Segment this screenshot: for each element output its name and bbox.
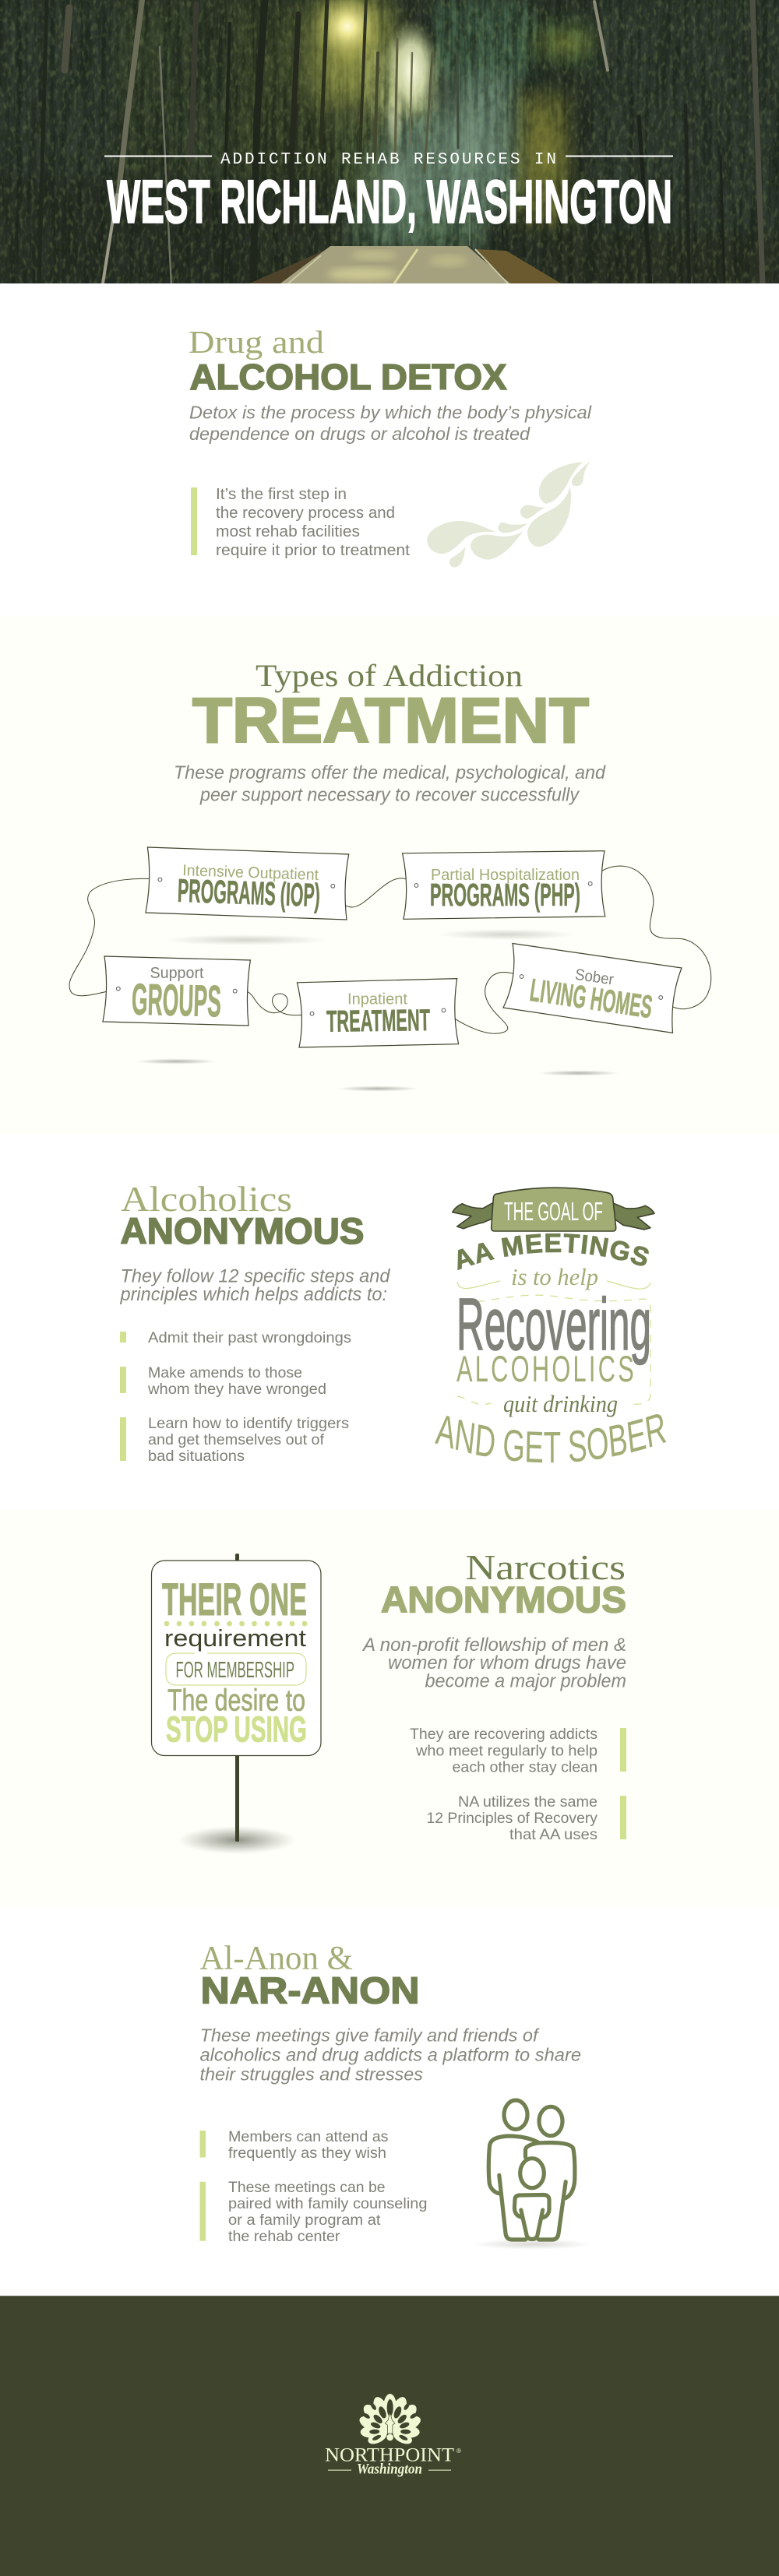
heading: anonymous: ANONYMOUS [120, 1210, 365, 1251]
intro text: dependence on drugs or alcohol is treated [189, 424, 530, 444]
bullet: make amends: Make amends to those [148, 1364, 302, 1381]
intro text: women for whom drugs have [388, 1652, 626, 1673]
sign text: their one: THEIR ONE [162, 1575, 307, 1625]
point: family counseling [199, 2179, 432, 2245]
connecting wires [69, 866, 711, 1033]
swashes and dashed frame [457, 1281, 650, 1405]
road [249, 246, 561, 283]
intro text: peer support necessary to recover successfully [199, 785, 580, 805]
sign: intensive outpatient programs: Intensive Outpatient [182, 862, 319, 884]
point: family counseling: These meetings can be [228, 2179, 385, 2196]
logo: registered mark: ® [456, 2448, 461, 2455]
intro text: They follow 12 specific steps and [120, 1266, 390, 1286]
sign: partial hospitalization programs: Partial Hospitalization [431, 867, 580, 884]
panel: alcoholics anonymous [120, 1179, 667, 1465]
intro text: These meetings give family and friends of [199, 2025, 540, 2046]
intro text: principles which helps addicts to: [120, 1284, 387, 1305]
sign: sober living homes: Sober [574, 966, 615, 989]
sign pole [235, 1554, 239, 1842]
sign board [151, 1561, 321, 1755]
bullet: learn triggers: bad situations [148, 1448, 245, 1465]
script: quit drinking: quit drinking [503, 1390, 618, 1417]
logo: washington script: Washington [357, 2461, 422, 2478]
sign: intensive outpatient programs: PROGRAMS (IOP) [177, 872, 321, 913]
heading: types of addiction: Types of Addiction [256, 658, 523, 693]
point: family counseling: paired with family counseling [228, 2195, 427, 2212]
bullet: learn triggers [120, 1415, 353, 1465]
callout text: the recovery process and [216, 505, 395, 522]
heading: anonymous: ANONYMOUS [381, 1579, 626, 1620]
for membership pill: FOR MEMBERSHIP [176, 1658, 294, 1683]
bullet: make amends: whom they have wronged [147, 1381, 326, 1398]
point: attendance: frequently as they wish [228, 2145, 386, 2162]
heading: alcohol detox: ALCOHOL DETOX [190, 357, 507, 397]
panel: drug and alcohol detox [189, 324, 596, 568]
callout text: most rehab facilities [216, 523, 360, 540]
sign shadow [178, 1826, 296, 1854]
point: recovering addicts: each other stay clean [452, 1758, 597, 1775]
point: 12 principles: that AA uses [509, 1826, 597, 1843]
heading: alcoholics: Alcoholics [121, 1179, 292, 1219]
heading: narcotics: Narcotics [466, 1547, 626, 1587]
intro text: A non-profit fellowship of men & [361, 1635, 626, 1656]
sign: support groups: Support [150, 965, 204, 982]
light rays and colour glows [277, 0, 608, 257]
heading: nar-anon: NAR-ANON [201, 1970, 419, 2012]
sign: support groups [103, 956, 250, 1026]
intro text: become a major problem [425, 1671, 626, 1691]
point: family counseling: the rehab center [228, 2228, 340, 2245]
forest photo background [0, 0, 779, 288]
sign: sober living homes: LIVING HOMES [527, 972, 654, 1025]
sign: sober living homes [503, 944, 682, 1033]
sign shadows [136, 929, 619, 1092]
word: alcoholics: ALCOHOLICS [456, 1348, 636, 1389]
bullet: learn triggers: Learn how to identify triggers [148, 1415, 349, 1432]
for membership pill [166, 1653, 306, 1685]
sign: partial hospitalization programs: PROGRAMS (PHP) [430, 877, 580, 913]
icon: leaf sprig [427, 461, 590, 568]
header: forest road photograph with title [0, 0, 779, 288]
logo: peacock emblem [358, 2394, 423, 2447]
panel: narcotics anonymous [151, 1547, 632, 1854]
point: recovering addicts: who meet regularly to help [415, 1742, 597, 1759]
sign text: stop using: STOP USING [166, 1709, 307, 1749]
sign text: the desire to: The desire to [167, 1684, 305, 1718]
sign: inpatient treatment: TREATMENT [326, 1004, 430, 1039]
tree trunks [39, 0, 763, 288]
intro text: their struggles and stresses [199, 2064, 424, 2085]
curved text: aa meetings: AA MEETINGS [457, 1233, 649, 1271]
intro text: alcoholics and drug addicts a platform to share [199, 2045, 581, 2065]
callout text: It’s the first step in [216, 486, 347, 503]
point: attendance: Members can attend as [228, 2128, 389, 2145]
heading: treatment: TREATMENT [192, 685, 589, 756]
header subtitle with rules: ADDICTION REHAB RESOURCES IN [220, 151, 556, 169]
logo: northpoint wordmark: NORTHPOINT [325, 2445, 454, 2466]
sign: partial hospitalization programs [403, 851, 605, 919]
footer band [0, 2296, 779, 2576]
sign: support groups: GROUPS [131, 974, 222, 1026]
heading: al-anon: Al-Anon & [199, 1940, 353, 1976]
dotted divider [164, 1621, 307, 1626]
sign: inpatient treatment [297, 979, 459, 1047]
panel: types of addiction treatment [69, 658, 711, 1092]
ribbon banner: THE GOAL OF [504, 1197, 603, 1226]
script: is to help: is to help [511, 1263, 598, 1290]
callout bar [191, 487, 197, 555]
sign text: requirement: requirement [164, 1624, 306, 1652]
membership sign [151, 1554, 321, 1854]
icon: family [471, 2100, 593, 2250]
point: recovering addicts: They are recovering addicts [410, 1726, 597, 1743]
point: 12 principles: NA utilizes the same [458, 1793, 597, 1811]
typographic badge: goal of AA meetings [435, 1187, 667, 1462]
point: 12 principles [427, 1793, 626, 1843]
point: attendance [199, 2128, 393, 2162]
bullet: make amends [120, 1364, 326, 1398]
ribbon banner [453, 1188, 654, 1231]
callout text: require it prior to treatment [216, 542, 410, 559]
heading: drug and: Drug and [189, 324, 324, 360]
sign: intensive outpatient programs [146, 847, 349, 920]
bullet: admit wrongdoings: Admit their past wrongdoings [148, 1329, 351, 1346]
point: recovering addicts [410, 1726, 626, 1775]
curved text: and get sober: AND GET SOBER [435, 1414, 667, 1462]
panel: al-anon and nar-anon [199, 1940, 593, 2250]
intro text: Detox is the process by which the body’s physical [189, 402, 592, 422]
point: family counseling: or a family program at [228, 2212, 381, 2229]
intro text: These programs offer the medical, psychological, and [174, 762, 606, 783]
bullet: learn triggers: and get themselves out of [148, 1431, 325, 1448]
sign: inpatient treatment: Inpatient [347, 991, 407, 1008]
point: 12 principles: 12 Principles of Recovery [427, 1810, 597, 1827]
